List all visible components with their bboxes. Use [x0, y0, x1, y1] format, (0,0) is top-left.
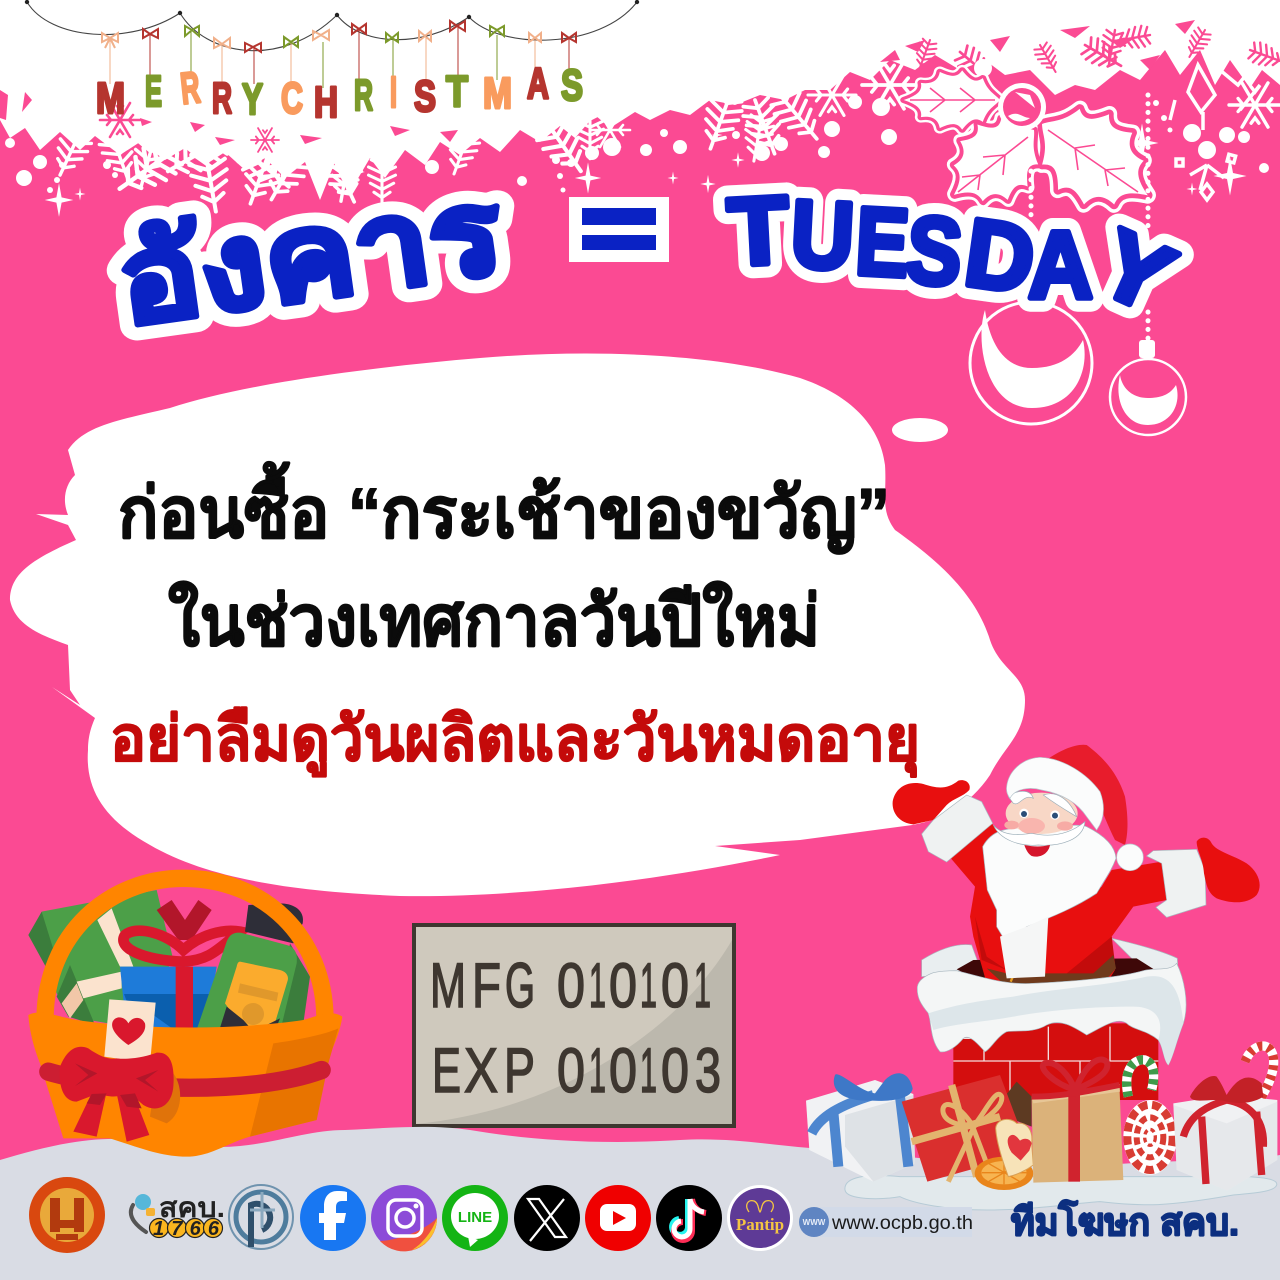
- title: tuesday in english: D: [959, 199, 1041, 314]
- red bow: [60, 1047, 174, 1142]
- pompom: [1117, 844, 1143, 871]
- merry christmas hanging letters: M: [483, 69, 512, 118]
- chimney brick: [953, 1023, 1158, 1100]
- holly decoration: [904, 55, 1260, 345]
- icon: pantip: [727, 1185, 793, 1251]
- santa in chimney: [893, 745, 1260, 1100]
- hotline 1766 logo: 1766: [153, 1218, 220, 1240]
- merry christmas hanging letters: E: [145, 67, 162, 116]
- striped lollipop: [1123, 1100, 1177, 1175]
- kraft gift: [1032, 1059, 1123, 1183]
- dark bottle: [245, 903, 303, 943]
- merry christmas hanging letters: I: [390, 68, 397, 117]
- icon: x: [514, 1185, 580, 1251]
- date label plate: 1: [694, 951, 711, 1021]
- title: tuesday in english: A: [1028, 212, 1093, 319]
- basket body: [28, 1012, 342, 1157]
- blue gift: [120, 900, 240, 1032]
- title: tuesday in english: Y: [1083, 209, 1189, 334]
- gifts pile: [806, 1046, 1277, 1191]
- snow balls: [5, 59, 1269, 193]
- diamond snowflake: [1170, 55, 1260, 200]
- expiry date line: 3: [695, 1036, 721, 1106]
- chocolate: [997, 1082, 1032, 1127]
- title: tuesday in thai: อังคาร: [110, 164, 510, 350]
- dotted hanging strings: [1031, 95, 1148, 345]
- icon: youtube: [585, 1185, 651, 1251]
- merry christmas hanging letters: C: [281, 74, 303, 123]
- hat fur trim: [1006, 757, 1103, 830]
- expiry date line: 1: [589, 1036, 606, 1106]
- icon: facebook: [300, 1185, 366, 1251]
- title: tuesday in thai: อังคาร: [110, 164, 510, 350]
- right mitten: [1197, 838, 1260, 902]
- title: tuesday in english: S: [902, 196, 966, 307]
- bows: [102, 21, 576, 52]
- website link: WWW: [803, 1218, 826, 1227]
- hanging strings: [110, 26, 569, 88]
- manufacture date line: 0: [557, 951, 585, 1021]
- snow frost header: [0, 0, 1280, 248]
- hotline 1766 logo: สคบ.: [159, 1192, 225, 1223]
- large bauble: [970, 302, 1092, 424]
- title: tuesday in english: E: [853, 188, 912, 297]
- snow under gifts: [845, 1175, 1277, 1210]
- main message text: ในช่วงเทศกาลวันปีใหม่: [168, 580, 820, 660]
- website link: www.ocpb.go.th: [831, 1213, 973, 1234]
- title: tuesday in english: A: [1028, 212, 1093, 319]
- icon: tiktok: [656, 1185, 722, 1251]
- gift basket: [28, 878, 342, 1157]
- main message text: ก่อนซื้อ “กระเช้าของขวัญ”: [118, 461, 890, 555]
- merry christmas hanging letters: [96, 59, 583, 127]
- green box: [28, 890, 173, 1027]
- gift card with heart: [104, 999, 156, 1063]
- manufacture date line: 1: [589, 951, 606, 1021]
- orange slice: [975, 1157, 1033, 1190]
- merry christmas hanging letters: R: [178, 63, 202, 114]
- santa belt: [987, 955, 1116, 987]
- date label plate: [414, 925, 734, 1126]
- merry christmas hanging letters: R: [354, 71, 373, 120]
- title: tuesday in english: U: [788, 180, 857, 291]
- small bauble: [1110, 340, 1186, 435]
- title: tuesday in english: D: [959, 199, 1041, 314]
- basket handle: [45, 878, 325, 1020]
- chimney back rim: [922, 938, 1178, 980]
- icon: line: LINE: [458, 1209, 492, 1226]
- heart cookie: [996, 1119, 1033, 1177]
- merry christmas hanging letters: T: [446, 67, 468, 116]
- main message text: อย่าลืมดูวันผลิตและวันหมดอายุ: [110, 705, 920, 777]
- speech bubble: [10, 354, 1025, 896]
- left mitten: [893, 780, 970, 824]
- merry christmas hanging letters: Y: [242, 75, 263, 124]
- team name: ทีมโฆษก สคบ.: [1011, 1199, 1239, 1244]
- green candy cane: [1127, 1060, 1154, 1097]
- equals sign: [569, 197, 669, 262]
- manufacture date line: F: [472, 951, 501, 1021]
- garland with bows: [25, 0, 639, 88]
- white gift with red ribbon: [1173, 1076, 1277, 1191]
- green bottle card: [196, 933, 310, 1032]
- expiry date line: P: [504, 1036, 535, 1106]
- merry christmas hanging letters: R: [212, 74, 232, 123]
- icon: instagram: [371, 1185, 437, 1251]
- merry christmas hanging letters: S: [414, 72, 436, 121]
- grey snow ground: [0, 1127, 1280, 1280]
- title: tuesday in english: U: [788, 180, 857, 291]
- expiry date line: 0: [661, 1036, 689, 1106]
- title: tuesday in english: Y: [1083, 209, 1189, 334]
- fur coat trim: [1000, 917, 1048, 978]
- manufacture date line: M: [430, 951, 466, 1021]
- icon: pantip: Pantip: [736, 1215, 784, 1234]
- hotline 1766 logo: [131, 1192, 225, 1240]
- ornament ring: [998, 83, 1046, 131]
- snow on chimney: [917, 963, 1186, 1065]
- chimney opening: [957, 958, 1154, 983]
- manufacture date line: 1: [640, 951, 657, 1021]
- speckles: [0, 20, 1195, 145]
- cpb logo: [229, 1185, 293, 1249]
- title: tuesday in english: E: [853, 188, 912, 297]
- manufacture date line: G: [505, 951, 535, 1021]
- manufacture date line: [430, 951, 711, 1021]
- website link: [799, 1207, 973, 1237]
- beard: [983, 825, 1116, 943]
- icon: line: [442, 1185, 508, 1251]
- title: tuesday in english: T: [725, 176, 792, 286]
- manufacture date line: 0: [609, 951, 637, 1021]
- title: tuesday in english: [725, 176, 1189, 334]
- expiry date line: 0: [557, 1036, 585, 1106]
- blue ribbon gift: [806, 1073, 915, 1182]
- left cuff: [922, 795, 993, 862]
- expiry date line: 1: [640, 1036, 657, 1106]
- merry christmas hanging letters: A: [527, 59, 549, 108]
- right cuff: [1147, 849, 1206, 917]
- manufacture date line: 0: [661, 951, 689, 1021]
- red candy cane: [1245, 1046, 1274, 1100]
- expiry date line: E: [432, 1036, 461, 1106]
- expiry date line: 0: [609, 1036, 637, 1106]
- expiry date line: [432, 1036, 721, 1106]
- merry christmas hanging letters: S: [561, 61, 583, 110]
- expiry date line: X: [464, 1036, 498, 1106]
- merry christmas hanging letters: H: [314, 78, 338, 127]
- title: tuesday in english: T: [725, 176, 792, 286]
- title: tuesday in english: S: [902, 196, 966, 307]
- merry christmas hanging letters: M: [96, 74, 125, 123]
- face: [993, 791, 1085, 857]
- basket ribbon: [48, 1070, 322, 1088]
- santa right side arm and body: [947, 822, 1167, 983]
- hat: [1047, 745, 1127, 845]
- red gift: [902, 1075, 1029, 1182]
- seal logo: [29, 1177, 105, 1253]
- main message text: [110, 461, 920, 777]
